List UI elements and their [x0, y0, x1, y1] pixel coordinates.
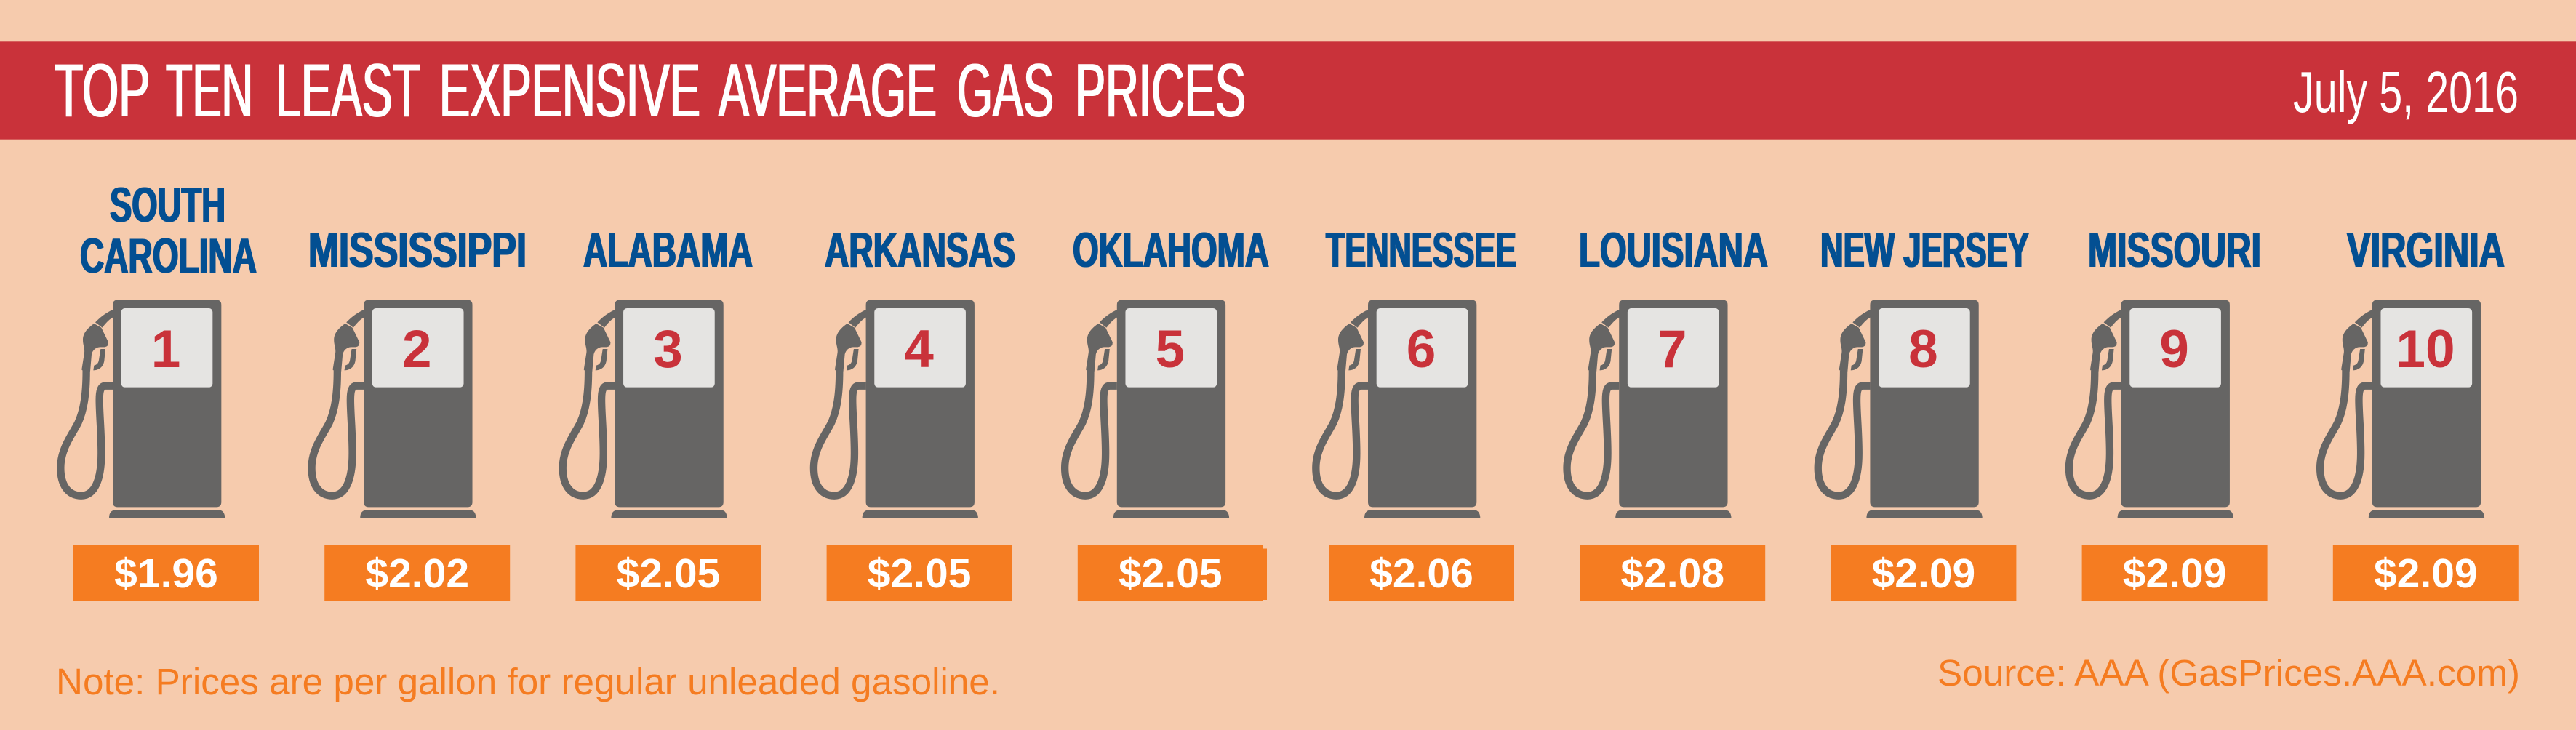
state name: Arkansas: ARKANSAS — [825, 222, 1015, 278]
state name: South Carolina — [80, 177, 257, 284]
title: LEAST — [276, 49, 420, 133]
icon: gas pump 8 — [1818, 300, 1983, 518]
icon: gas pump 2: 2 — [402, 320, 432, 379]
price: Alabama: $2.05 — [617, 550, 720, 597]
price: Missouri — [2082, 545, 2268, 601]
price: South Carolina — [73, 545, 259, 601]
price: Oklahoma — [1078, 545, 1267, 601]
icon: gas pump 2 — [312, 300, 476, 518]
icon: gas pump 5: 5 — [1155, 320, 1185, 379]
title: GAS — [957, 49, 1054, 133]
title: PRICES — [1075, 49, 1246, 133]
header banner — [0, 41, 2576, 140]
price: Oklahoma: $2.05 — [1119, 550, 1223, 597]
price: Louisiana: $2.08 — [1620, 550, 1724, 597]
state name: Mississippi: MISSISSIPPI — [308, 222, 527, 278]
price: Virginia: $2.09 — [2374, 550, 2478, 597]
price: Alabama — [575, 545, 761, 601]
price: South Carolina: $1.96 — [114, 550, 218, 597]
icon: gas pump 3 — [563, 300, 727, 518]
state name: Missouri: MISSOURI — [2088, 222, 2261, 278]
title: TOP — [55, 49, 149, 133]
price: Arkansas: $2.05 — [868, 550, 971, 597]
icon: gas pump 1 — [60, 300, 225, 518]
price: Mississippi: $2.02 — [365, 550, 469, 597]
icon: gas pump 9: 9 — [2159, 320, 2189, 379]
icon: gas pump 8: 8 — [1908, 320, 1938, 379]
state name: New Jersey: NEW JERSEY — [1820, 222, 2029, 278]
state name: Virginia: VIRGINIA — [2347, 222, 2505, 278]
icon: gas pump 6 — [1316, 300, 1480, 518]
title: TEN — [166, 49, 253, 133]
icon: gas pump 9 — [2069, 300, 2233, 518]
state name: South Carolina: CAROLINA — [80, 228, 257, 284]
icon: gas pump 4: 4 — [904, 320, 934, 379]
price: Missouri: $2.09 — [2123, 550, 2226, 597]
icon: gas pump 5 — [1065, 300, 1229, 518]
icon: gas pump 10 — [2320, 300, 2484, 518]
state name: Oklahoma: OKLAHOMA — [1073, 222, 1269, 278]
icon: gas pump 4 — [814, 300, 978, 518]
state name: South Carolina: SOUTH — [110, 177, 225, 233]
price: New Jersey: $2.09 — [1872, 550, 1975, 597]
state name: Alabama: ALABAMA — [583, 222, 753, 278]
icon: gas pump 1: 1 — [151, 320, 180, 379]
icon: gas pump 6: 6 — [1407, 320, 1436, 379]
price: New Jersey — [1831, 545, 2016, 601]
title: EXPENSIVE — [439, 49, 700, 133]
price: Louisiana — [1580, 545, 1765, 601]
icon: gas pump 3: 3 — [653, 320, 683, 379]
icon: gas pump 7: 7 — [1657, 320, 1687, 379]
title: AVERAGE — [719, 49, 937, 133]
icon: gas pump 7 — [1567, 300, 1732, 518]
state name: Tennessee: TENNESSEE — [1326, 222, 1516, 278]
price: Mississippi — [324, 545, 510, 601]
price: Arkansas — [827, 545, 1012, 601]
icon: gas pump 10: 10 — [2396, 320, 2455, 379]
note: Note: Prices are per gallon for regular unleaded gasoline. — [56, 661, 1000, 702]
price: Virginia — [2333, 545, 2519, 601]
source: Source: AAA (GasPrices.AAA.com) — [1937, 652, 2520, 694]
price: Tennessee — [1329, 545, 1514, 601]
state name: Louisiana: LOUISIANA — [1579, 222, 1768, 278]
price: Tennessee: $2.06 — [1369, 550, 1473, 597]
